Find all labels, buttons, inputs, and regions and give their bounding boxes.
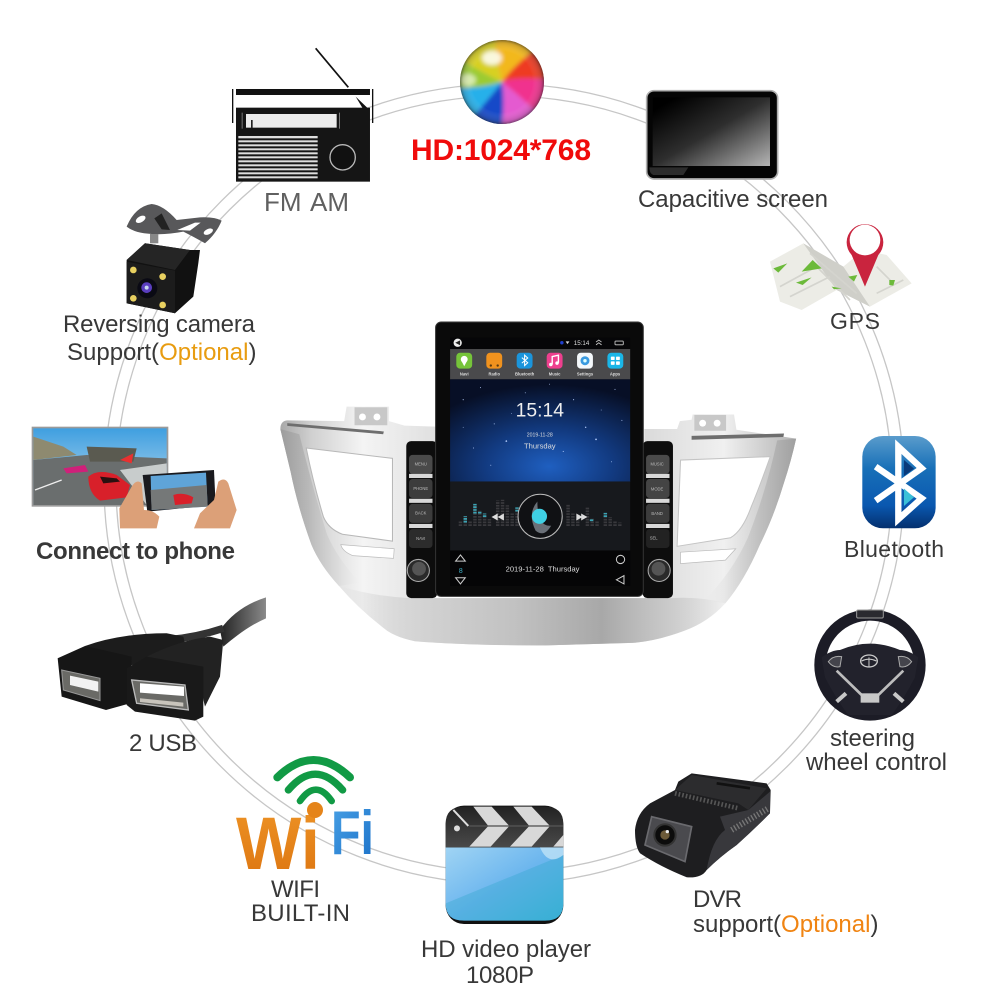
- right slot: [681, 549, 736, 564]
- back button: BACK: [415, 511, 427, 516]
- icon: apps: [607, 353, 623, 369]
- icon: screen mirroring: [32, 427, 237, 528]
- feature: steering wheel: [805, 610, 947, 776]
- label: bluetooth: Bluetooth: [844, 536, 944, 562]
- power knob: [407, 559, 429, 582]
- date line: 2019-11-28 Thursday: [506, 565, 580, 574]
- left slot: [341, 545, 394, 558]
- disc play button: [518, 494, 562, 538]
- dock labels: Navi: [460, 372, 469, 377]
- label: capacitive: Capacitive screen: [638, 186, 828, 213]
- right control strip: [643, 441, 673, 598]
- icon: dash camera: [635, 773, 771, 877]
- feature: bluetooth: [844, 436, 944, 562]
- volume down: [456, 578, 465, 584]
- navi button: NAVI: [416, 536, 425, 541]
- equalizer: [460, 500, 620, 526]
- phone: [143, 470, 216, 512]
- icon: navi: [456, 353, 472, 369]
- icon: wifi logo: [236, 760, 374, 885]
- feature: DVR: [635, 773, 878, 938]
- right bracket: [694, 415, 726, 431]
- label: 1080P: 1080P: [466, 962, 534, 989]
- sel button: [646, 529, 670, 548]
- dock labels: Bluetooth: [515, 372, 535, 377]
- icon: bluetooth: [517, 353, 533, 369]
- lower band shading: [339, 586, 725, 645]
- label: DVR support: support(Optional): [693, 911, 878, 938]
- feature: radio: [232, 48, 373, 217]
- camera body: [127, 243, 200, 313]
- left hand: [119, 481, 159, 528]
- feature: wifi: [236, 760, 374, 927]
- sel button: SEL: [650, 535, 658, 540]
- label: HD video player: HD video player: [421, 936, 591, 963]
- feature: resolution: [411, 36, 591, 167]
- head unit: [280, 322, 796, 645]
- volume up: [456, 555, 465, 561]
- left edge shading: [280, 429, 360, 586]
- band button: [646, 504, 670, 523]
- screen bezel: [436, 322, 643, 596]
- music button: MUSIC: [650, 462, 664, 467]
- label: DVR: DVR: [693, 886, 742, 913]
- label: connect: Connect to phone: [36, 538, 235, 565]
- icon: bluetooth: [862, 436, 936, 528]
- feature: GPS: [770, 224, 912, 334]
- back triangle: [616, 576, 624, 584]
- dock labels: Music: [549, 372, 561, 377]
- previous track: [491, 514, 504, 520]
- icon: radio: [232, 48, 373, 182]
- right vent opening: [677, 457, 770, 546]
- home button: [616, 555, 625, 564]
- dock labels: [460, 372, 621, 377]
- feature: reversing camera: [63, 204, 256, 366]
- decorative rings: [104, 84, 904, 884]
- menu button: MENU: [415, 462, 427, 467]
- label: WIFI: WIFI: [271, 876, 320, 903]
- navi button: [409, 529, 432, 548]
- bottom bar: [450, 550, 630, 586]
- icon: music: [547, 353, 563, 369]
- feature: connect to phone: [32, 427, 237, 565]
- mode button: [646, 479, 670, 498]
- left control strip: [406, 441, 437, 598]
- signal arcs: [277, 760, 350, 801]
- label: reversing camera: Reversing camera: [63, 311, 256, 338]
- status bar: 15:14: [574, 340, 590, 347]
- icon: radio: [486, 353, 502, 369]
- icon: settings: [577, 353, 593, 369]
- logo dot: [307, 802, 323, 818]
- back button: [409, 504, 432, 523]
- volume number: 8: [459, 568, 463, 575]
- label: FM AM: AM: [310, 187, 349, 217]
- mode button: MODE: [651, 486, 664, 491]
- icon: rainbow ball: [460, 40, 544, 124]
- phone button: [409, 479, 432, 498]
- clock: 15:14: [516, 400, 564, 421]
- dock labels: Radio: [489, 372, 500, 377]
- tune knob: [648, 559, 670, 582]
- feature: capacitive screen: [638, 91, 828, 213]
- top trim right: [692, 434, 784, 440]
- dock labels: Settings: [577, 372, 594, 377]
- icon: reversing camera: [127, 204, 222, 313]
- silver dash frame: [280, 407, 796, 645]
- left vent opening: [306, 448, 392, 541]
- band button: BAND: [651, 511, 663, 516]
- feature: usb: [58, 597, 266, 757]
- icon: map and pin: [770, 224, 912, 310]
- screen: [450, 338, 630, 586]
- starry wallpaper: [450, 379, 630, 482]
- label: support optional: Support(Optional): [67, 339, 256, 366]
- label: 2 USB: 2 USB: [129, 730, 197, 757]
- music button: [646, 455, 670, 474]
- top trim left: [287, 423, 384, 434]
- label: steering: steering: [830, 725, 915, 752]
- logo letters Fi: Fi: [331, 799, 374, 868]
- status bar: [450, 338, 630, 349]
- logo letters Wi: Wi: [236, 802, 320, 885]
- label: GPS: GPS: [830, 308, 880, 334]
- feature: video player: [421, 806, 591, 989]
- label: wheel control: wheel control: [805, 749, 947, 776]
- phone button: PHONE: [413, 486, 428, 491]
- right edge shading: [705, 439, 796, 603]
- label: FM AM: FM: [264, 187, 302, 217]
- label: BUILT-IN: BUILT-IN: [251, 900, 350, 927]
- left bracket: [355, 407, 387, 425]
- icon: usb plugs: [58, 597, 266, 721]
- icon: clapperboard: [446, 806, 563, 924]
- app dock: [450, 349, 630, 379]
- label: resolution: HD:1024*768: [411, 134, 591, 167]
- next track: [576, 514, 587, 520]
- date: 2019-11-28: [527, 433, 553, 439]
- right hand: [194, 480, 237, 528]
- menu button: [409, 455, 432, 474]
- dock labels: Apps: [610, 372, 621, 377]
- monitor: [32, 427, 168, 507]
- music widget: [450, 481, 630, 551]
- weekday: Thursday: [524, 441, 556, 450]
- mounting bracket: [127, 204, 222, 243]
- icon: tablet screen: [647, 91, 778, 179]
- icon: steering wheel: [820, 610, 920, 715]
